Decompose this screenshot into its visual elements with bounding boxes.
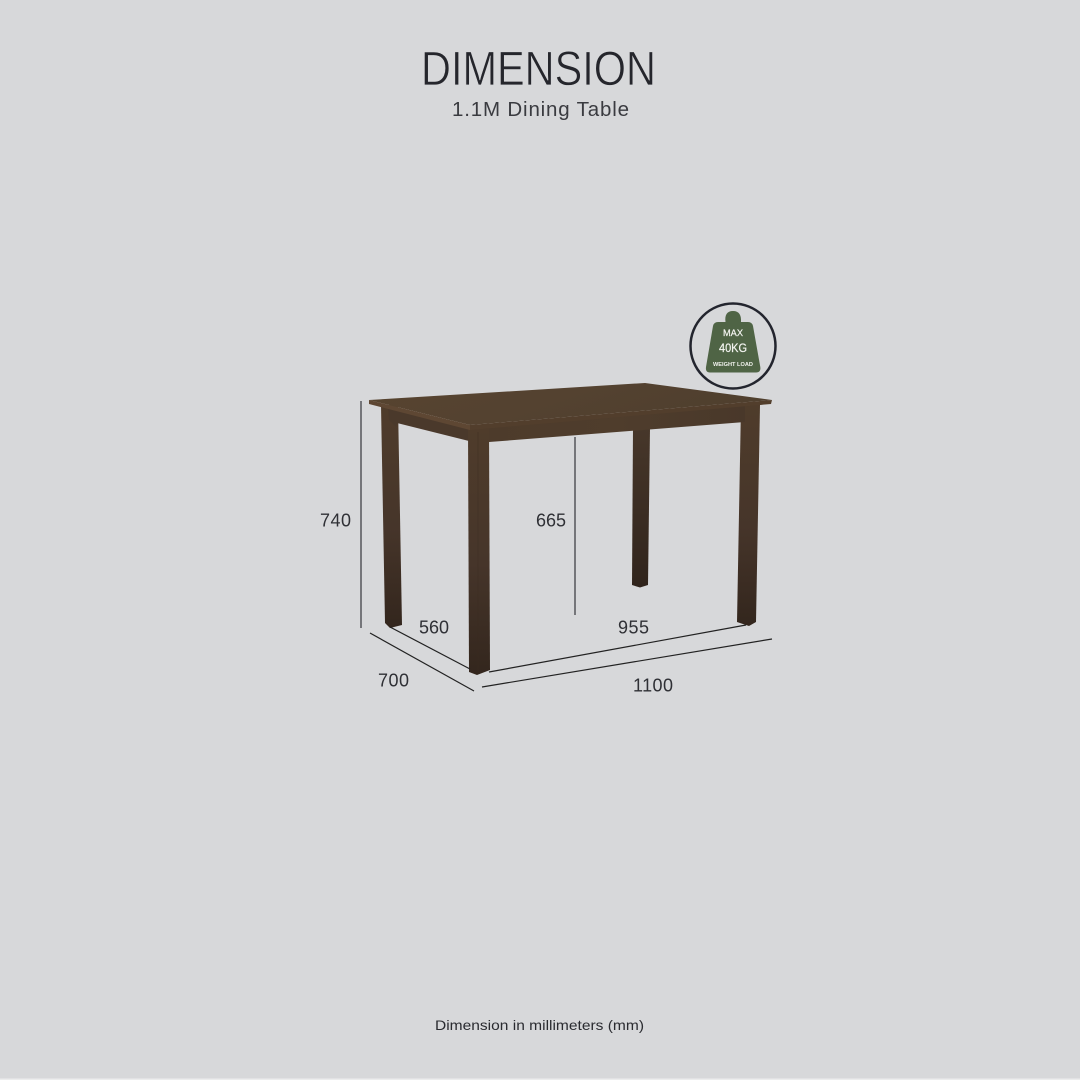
table top (369, 383, 772, 430)
dimension label: 700: 700 (378, 670, 409, 690)
dimension label: 740: 740 (320, 510, 351, 530)
weight text: load: WEIGHT LOAD (713, 362, 753, 368)
footnote: Dimension in millimeters (mm) (435, 1017, 644, 1033)
table illustration (369, 383, 772, 675)
weight text: 40KG: 40KG (719, 343, 747, 355)
dimension line: overall height (360, 401, 362, 628)
title: DIMENSION (421, 43, 656, 96)
left apron (388, 406, 469, 441)
back leg (632, 428, 650, 588)
right apron (489, 404, 745, 442)
left leg (381, 405, 402, 628)
subtitle: 1.1M Dining Table (452, 98, 629, 121)
weight load badge (690, 304, 776, 388)
weight text: max: MAX (723, 328, 743, 338)
dimension label: 955: 955 (618, 618, 649, 638)
dimension line: clearance height (574, 437, 576, 615)
front leg (468, 428, 490, 675)
dimension line: inner depth (390, 627, 470, 669)
dimension label: 560: 560 (419, 618, 449, 638)
right leg (737, 405, 760, 626)
badge ring (690, 304, 776, 388)
weight icon (706, 311, 760, 372)
dimension line: overall width (482, 639, 772, 687)
dimension line: overall depth (370, 633, 474, 691)
dimension label: 665: 665 (536, 510, 566, 530)
dimension label: 1100: 1100 (633, 676, 673, 696)
dimension line: inner width (489, 625, 746, 672)
